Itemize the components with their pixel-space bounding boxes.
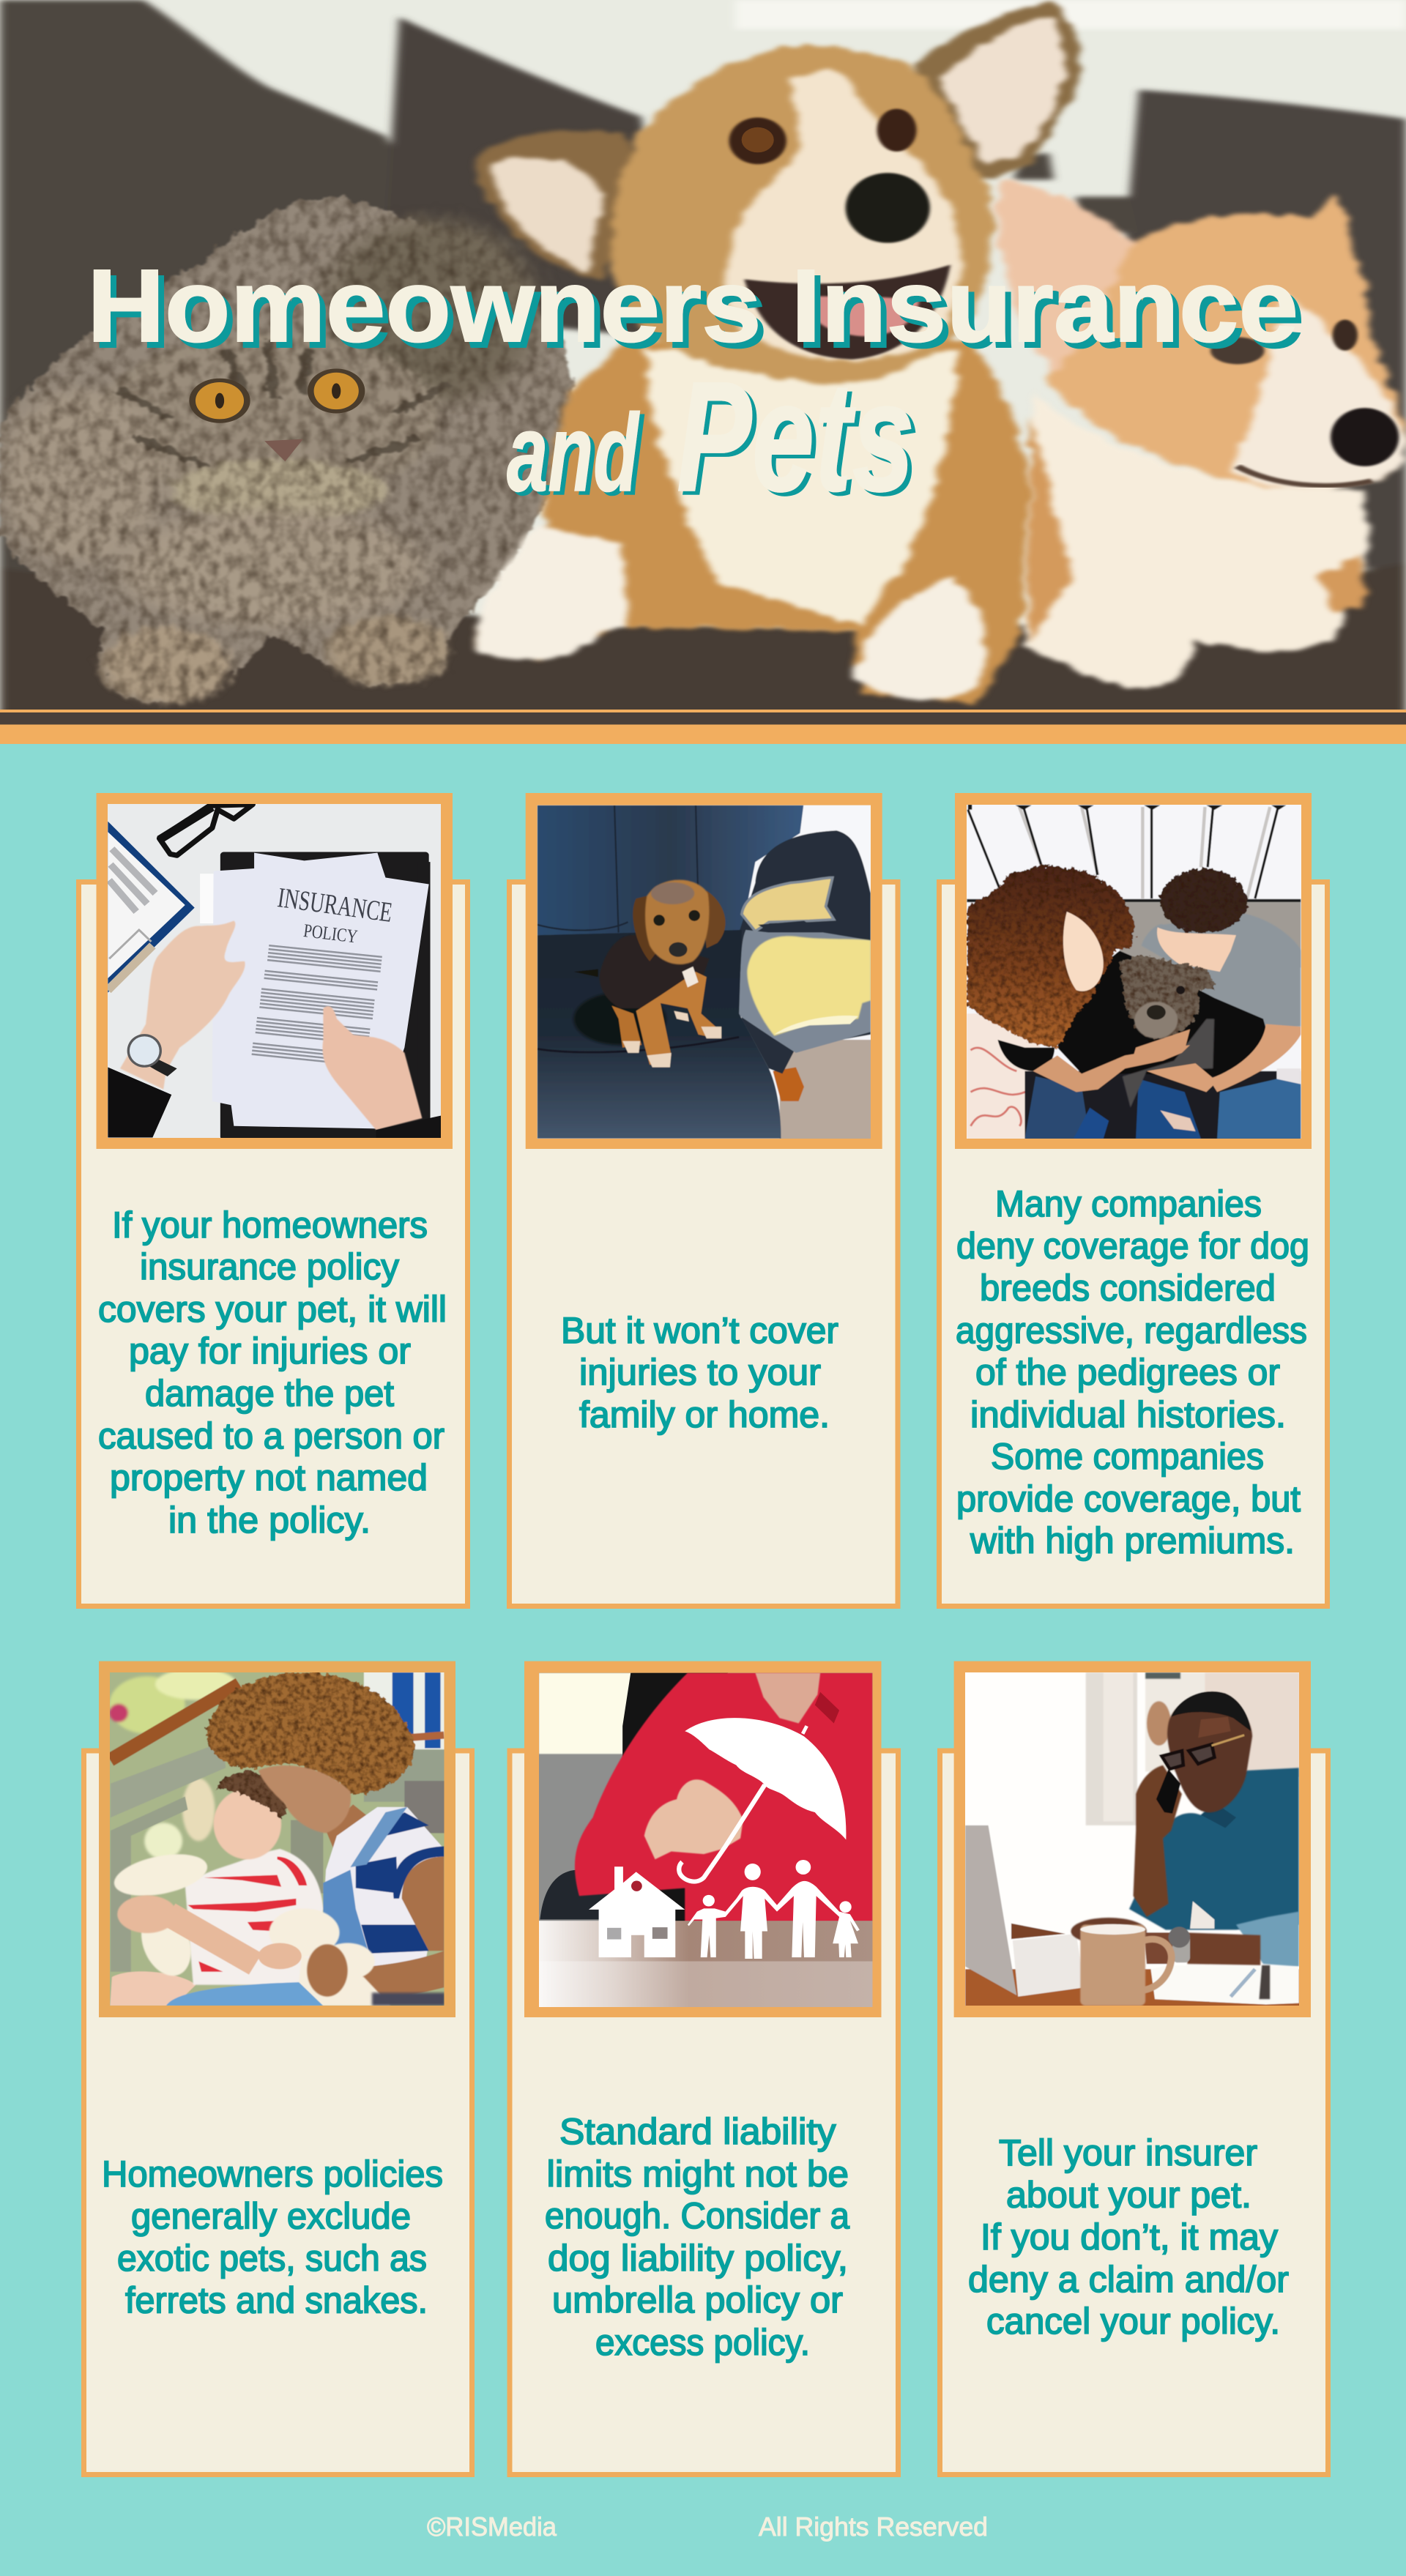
card 6 text: about your pet. (1006, 2175, 1251, 2216)
photo frame (954, 1661, 1311, 2017)
card 5 text: dog liability policy, (548, 2238, 848, 2279)
card 2 text: family or home. (579, 1394, 830, 1435)
card 5 text: Standard liability (559, 2111, 836, 2152)
photo: hands on insurance policy (108, 804, 441, 1138)
card 6 text: deny a claim and/or (968, 2259, 1289, 2300)
photo frame (99, 1661, 455, 2017)
card 5: liability limits (510, 1661, 898, 2475)
card body (83, 1751, 472, 2475)
banner photo: cat and two corgis (0, 0, 1406, 762)
photo: man on phone at laptop (957, 1661, 1320, 2011)
card 2 text (561, 1310, 838, 1435)
card 1 text: insurance policy (140, 1246, 399, 1287)
card 3 text: Some companies (991, 1436, 1264, 1477)
banner (0, 0, 1406, 762)
card 4 text: exotic pets, such as (117, 2238, 427, 2279)
card 6 text: cancel your policy. (986, 2301, 1280, 2342)
card 1 text: covers your pet, it will (98, 1289, 447, 1330)
card 6 text (968, 2132, 1289, 2342)
card 3 text: deny coverage for dog (956, 1226, 1309, 1267)
card 4 text (102, 2154, 443, 2321)
card 1 text (98, 1205, 447, 1541)
card 5 text: enough. Consider a (545, 2195, 849, 2236)
footer: ©RISMedia (427, 2512, 557, 2542)
card 1 text: in the policy. (168, 1500, 371, 1541)
card 1 text: property not named (110, 1457, 428, 1498)
photo frame (97, 793, 453, 1149)
photo: hands on insurance policy: POLICY (302, 920, 359, 947)
photo: children holding ferrets (93, 1661, 456, 2011)
card body (510, 882, 898, 1607)
footer (427, 2512, 988, 2542)
card 3 text: breeds considered (980, 1267, 1276, 1309)
title line 1: Homeowners Insurance (87, 247, 1298, 363)
card 1 text: If your homeowners (112, 1205, 428, 1246)
card 2 text: But it won’t cover (561, 1310, 838, 1351)
card 4 text: ferrets and snakes. (125, 2280, 428, 2321)
photo: couple with dog (967, 805, 1301, 1139)
right corgi (997, 179, 1406, 688)
card body (939, 882, 1327, 1607)
thin orange banner line (0, 710, 1406, 712)
cat (0, 196, 576, 704)
card 1: policy coverage (79, 793, 467, 1607)
card 2 text: injuries to your (579, 1352, 821, 1393)
photo frame (524, 1661, 882, 2017)
card 6: tell your insurer (940, 1661, 1328, 2475)
orange band (0, 725, 1406, 744)
card body (940, 1751, 1328, 2475)
card 3 text: of the pedigrees or (975, 1352, 1280, 1393)
title line 2: Pets (677, 349, 915, 524)
photo: umbrella over paper house and family (525, 1661, 888, 2011)
title line 2 (507, 349, 915, 524)
card 1 text: caused to a person or (98, 1415, 445, 1456)
card 3 text: individual histories. (970, 1394, 1286, 1435)
card 1 text: damage the pet (145, 1373, 394, 1414)
card body (79, 882, 467, 1607)
photo frame (955, 793, 1312, 1149)
card 4 text: Homeowners policies (102, 2154, 443, 2195)
card body (510, 1751, 898, 2475)
photo frame (526, 793, 882, 1149)
photo: hands on insurance policy: INSURANCE (276, 882, 394, 928)
card 5 text: umbrella policy or (552, 2279, 843, 2320)
footer: All Rights Reserved (759, 2512, 988, 2542)
card 6 text: If you don’t, it may (981, 2216, 1278, 2257)
card 3: breed restrictions (939, 793, 1327, 1607)
card 5 text (545, 2111, 849, 2363)
title line 2: and (507, 391, 640, 514)
card 3 text: aggressive, regardless (956, 1310, 1307, 1351)
card 4: exotic pets (83, 1661, 472, 2475)
card 6 text: Tell your insurer (999, 2132, 1257, 2173)
card 5 text: limits might not be (546, 2154, 849, 2195)
card 3 text: Many companies (995, 1183, 1262, 1224)
dark strip under line (0, 712, 1406, 725)
card 3 text: with high premiums. (970, 1520, 1295, 1561)
card 3 text (956, 1183, 1309, 1561)
card 4 text: generally exclude (131, 2195, 411, 2236)
photo: puppy on chewed sofa (538, 805, 871, 1139)
card 2: injuries not covered (510, 793, 898, 1607)
center corgi (473, 0, 1080, 704)
card 5 text: excess policy. (595, 2322, 810, 2363)
card 1 text: pay for injuries or (129, 1330, 411, 1371)
card 3 text: provide coverage, but (956, 1478, 1301, 1519)
